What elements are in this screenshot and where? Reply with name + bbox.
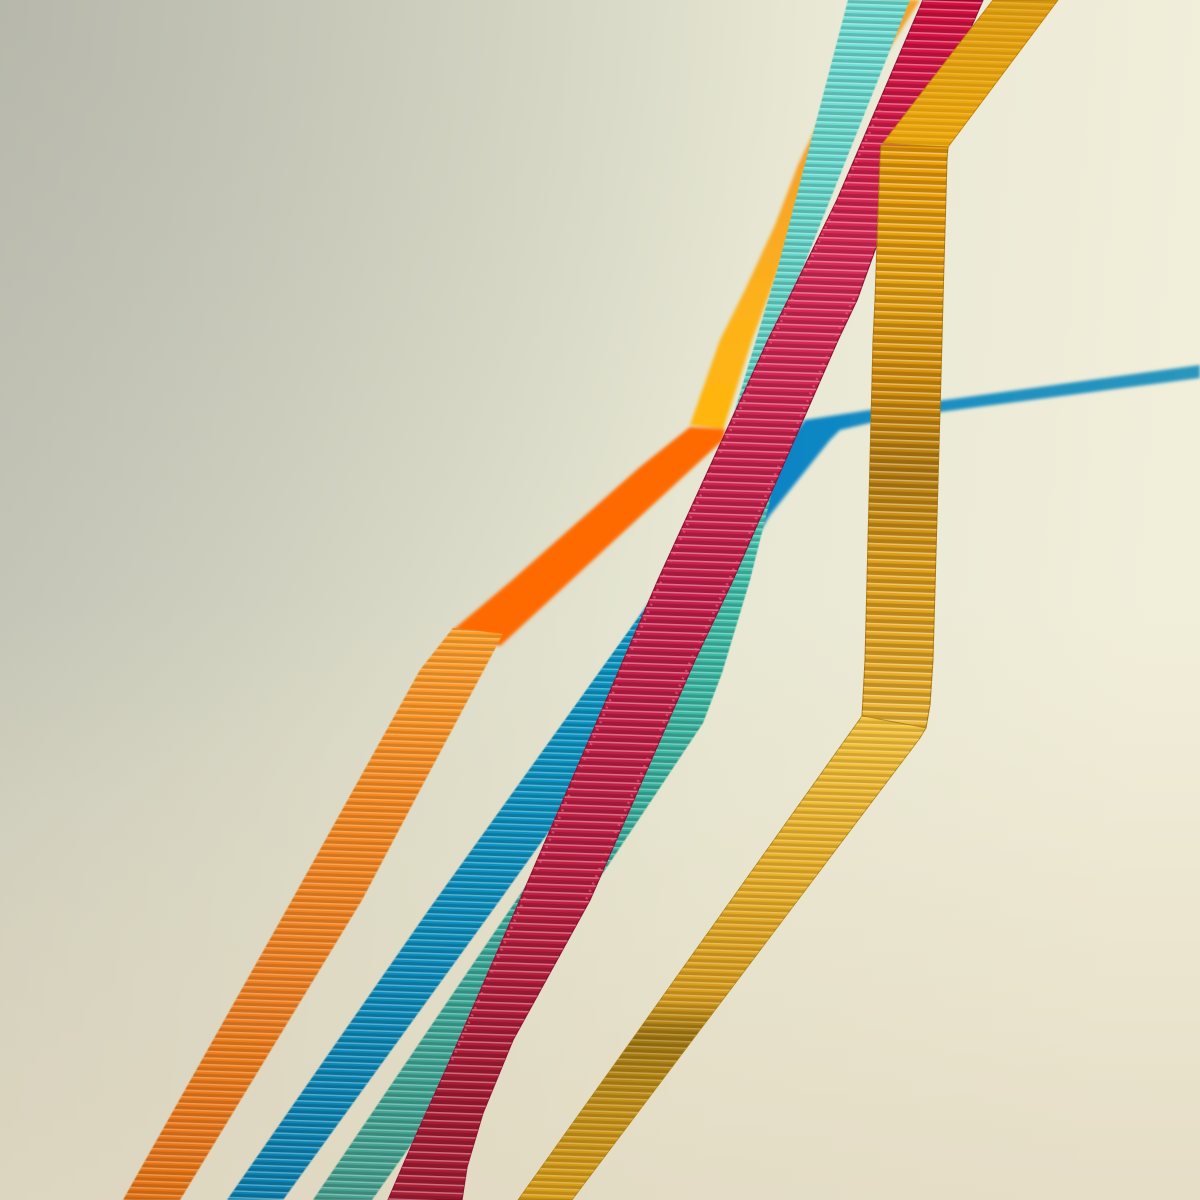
red ribbon xyxy=(388,0,983,1200)
blue ribbon xyxy=(227,365,1200,1200)
gold ribbon with two folds xyxy=(518,0,1058,1200)
teal ribbon xyxy=(313,0,910,1200)
orange ribbon xyxy=(123,0,920,1200)
